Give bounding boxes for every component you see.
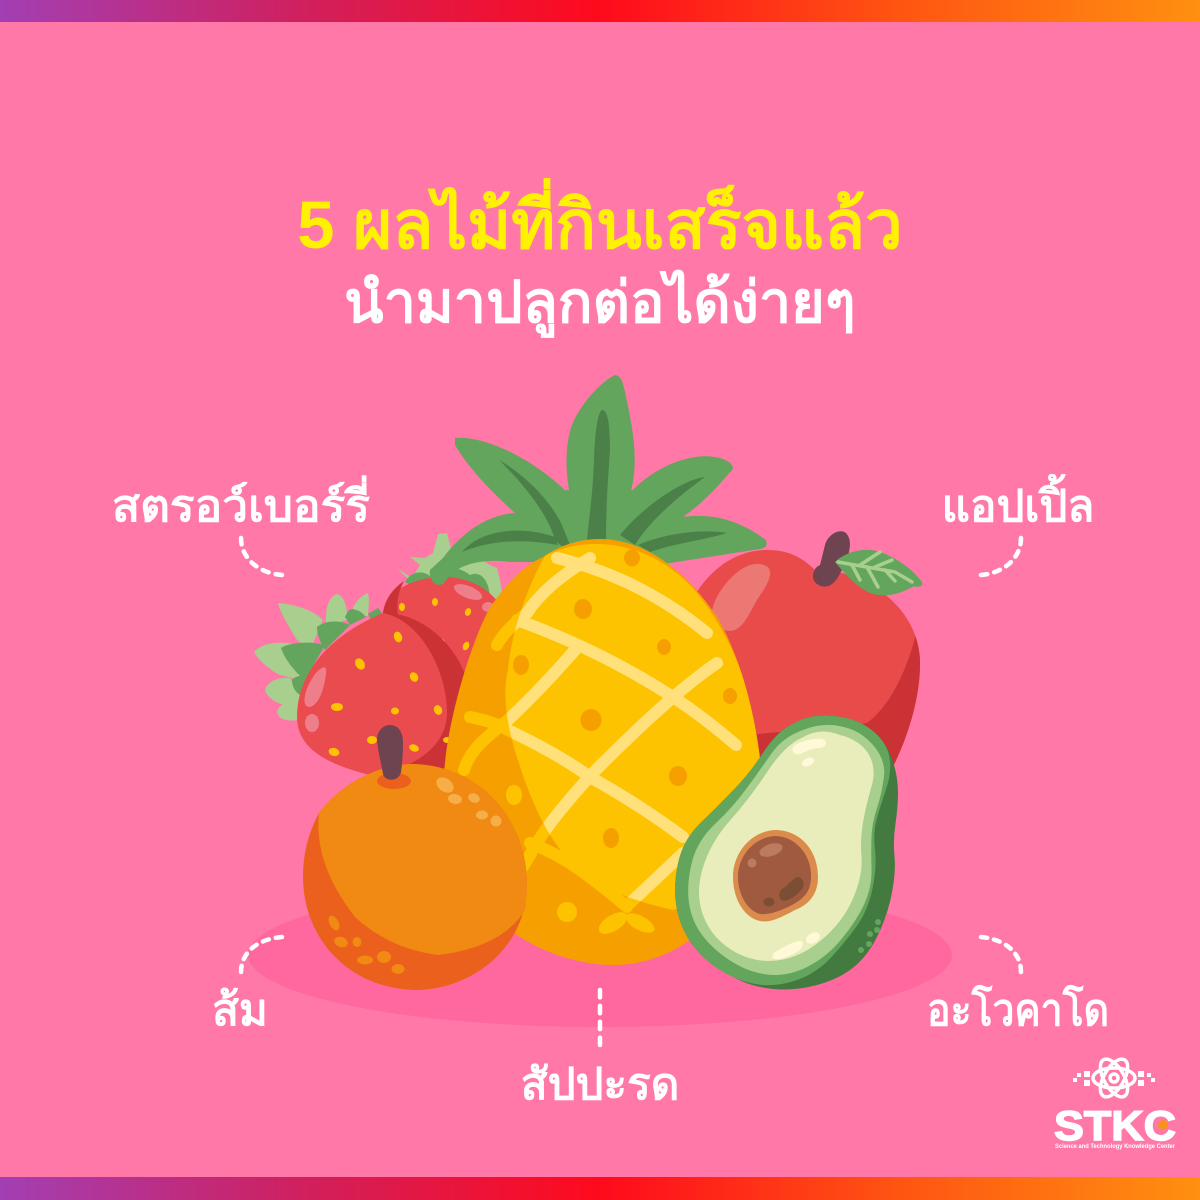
subtitle: นำมาปลูกต่อได้ง่ายๆ — [344, 269, 856, 338]
dashed pointer — [981, 937, 1021, 972]
label: avocado: อะโวคาโด — [927, 983, 1109, 1035]
label: apple — [942, 473, 1094, 575]
logo atom icon — [1093, 1055, 1135, 1101]
apple stem — [813, 531, 850, 587]
label: strawberry — [112, 475, 370, 575]
dashed pointer — [981, 538, 1021, 575]
avocado highlights — [772, 739, 826, 959]
icon: pineapple body — [443, 539, 765, 965]
logo: STKC: Science and Technology Knowledge Center — [1055, 1143, 1175, 1150]
avocado pit — [733, 830, 818, 921]
label: orange: ส้ม — [212, 986, 268, 1035]
lattice highlights — [506, 552, 742, 902]
dashed pointer — [241, 937, 282, 972]
ground shadow — [248, 883, 952, 1027]
icon: back strawberry — [383, 533, 510, 790]
label: avocado — [927, 937, 1109, 1035]
logo: STKC: STKC — [1054, 1102, 1176, 1149]
label: orange — [212, 937, 282, 1035]
top gradient bar — [0, 0, 1200, 22]
label: strawberry: สตรอว์เบอร์รี่ — [112, 475, 370, 531]
dashed pointer — [598, 990, 602, 1045]
icon: avocado — [675, 716, 898, 990]
bottom gradient bar — [0, 1177, 1200, 1200]
lattice in shade — [458, 610, 640, 913]
title: 5 ผลไม้ที่กินเสร็จแล้ว — [297, 177, 903, 263]
lattice tips — [595, 908, 657, 938]
icon: orange — [303, 725, 527, 990]
title — [297, 177, 903, 338]
icon: apple — [697, 531, 922, 765]
icon: pineapple leaves — [430, 375, 767, 585]
logo: STKC — [1054, 1055, 1176, 1150]
label: pineapple: สัปปะรด — [521, 1060, 679, 1109]
apple leaf — [835, 550, 922, 595]
orange stem — [377, 773, 411, 789]
label: apple: แอปเปิ้ล — [942, 473, 1094, 531]
dashed pointer — [241, 538, 282, 575]
icon: front strawberry — [254, 593, 470, 790]
